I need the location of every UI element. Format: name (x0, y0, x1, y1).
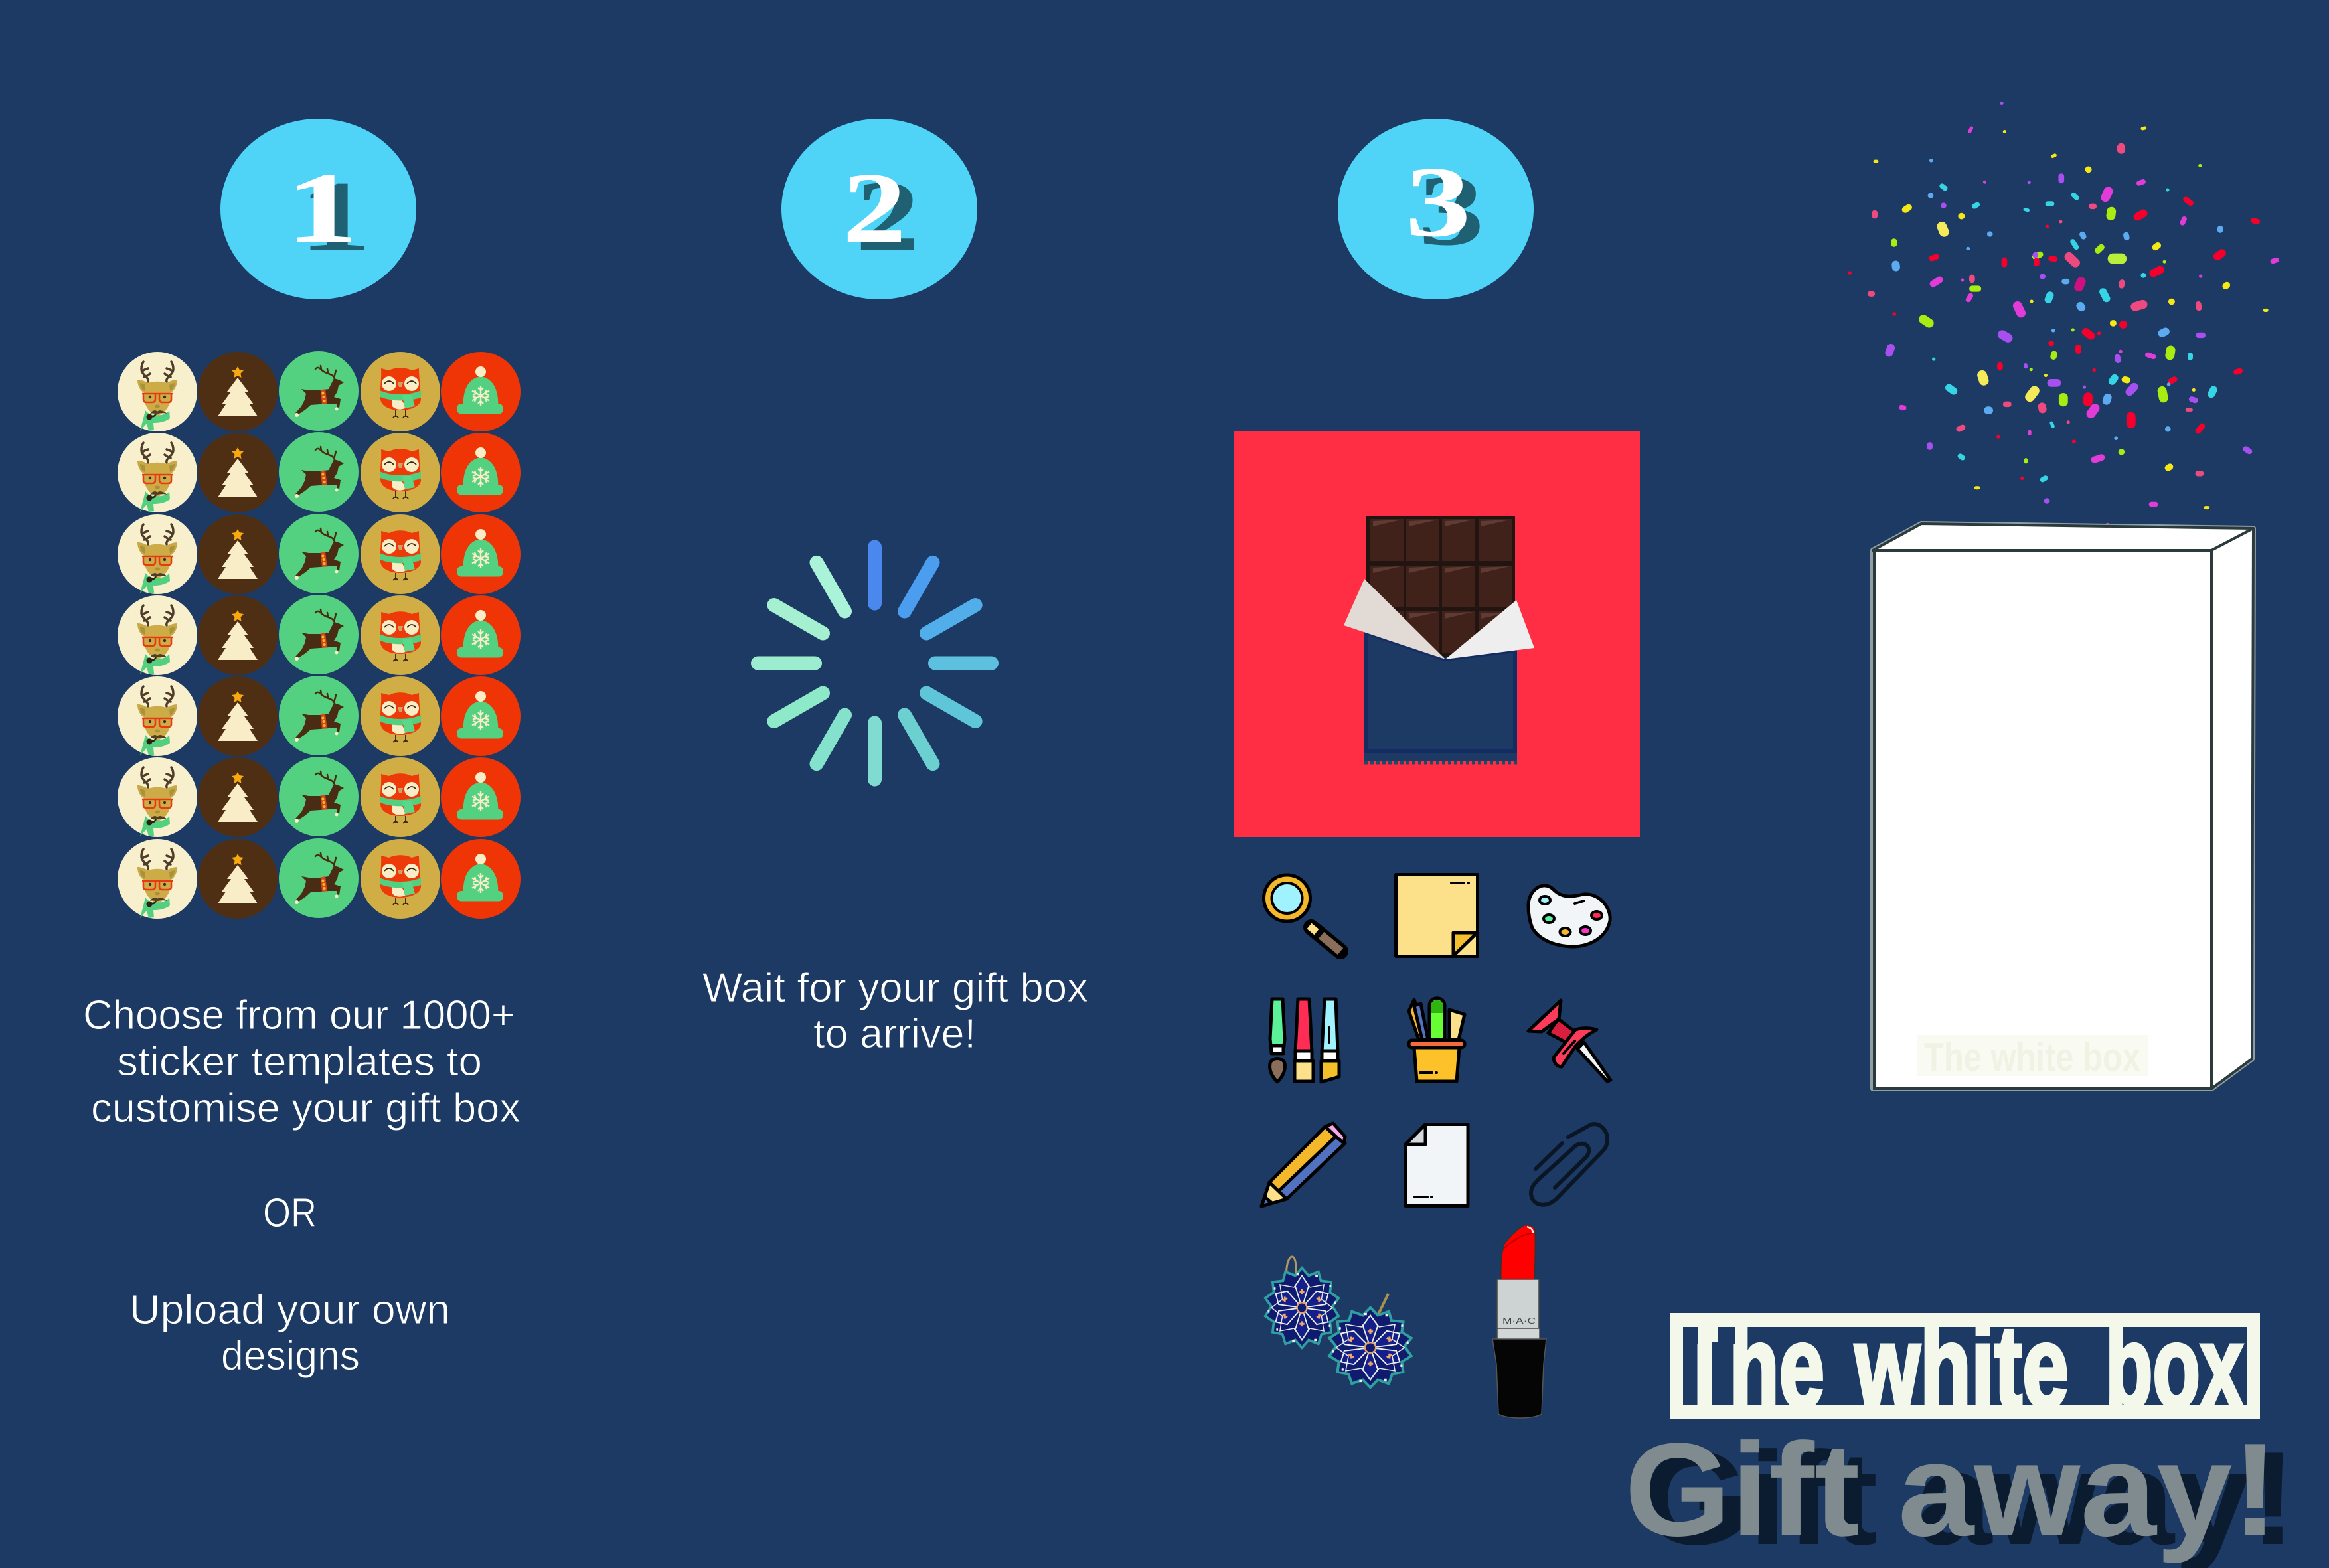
step 3 badge: 3 (1419, 155, 1484, 267)
faint logo on box: The white box (1924, 1035, 2140, 1079)
step 1 text: Choose from our 1000+ (83, 992, 515, 1038)
icon: paint palette (1528, 886, 1610, 947)
confetti: pink (1870, 147, 2201, 524)
step 1 badge: 1 (299, 160, 372, 272)
confetti: red (1850, 200, 2257, 478)
confetti burst (1850, 104, 2277, 524)
confetti: purple (1889, 104, 2249, 501)
lipstick: M·A·C (1502, 1316, 1536, 1326)
step 2 text (702, 965, 1088, 1057)
icon: pencil (1261, 1123, 1345, 1206)
icon: magnifying glass (1264, 875, 1340, 951)
confetti: lime (1894, 165, 2200, 462)
sticker sheet (118, 351, 521, 919)
slogan: Gift away!: Gift away! (1625, 1416, 2278, 1564)
step 1 badge: 1 (285, 151, 359, 264)
sticker row 2 (118, 432, 521, 512)
sticker row 4 (118, 595, 521, 675)
white gift box (1873, 524, 2253, 1089)
icon: brushes (1270, 999, 1339, 1082)
confetti: magenta (1901, 128, 2277, 505)
icon: sticky note (1396, 875, 1478, 956)
sticker row 3 (118, 514, 521, 594)
step 2 badge: 2 (843, 151, 906, 264)
icon: paper clip (1531, 1124, 1607, 1205)
step 3 badge: 3 (1405, 146, 1471, 258)
foil left (1344, 579, 1445, 659)
logo: The white box: white (1854, 1302, 2069, 1432)
step 1 text: sticker templates to (117, 1039, 482, 1085)
step 2 text: Wait for your gift box (702, 965, 1088, 1011)
confetti: blue (1895, 161, 2220, 438)
step 1 text: Upload your own (129, 1287, 450, 1333)
navy wrapper (1364, 633, 1517, 763)
icon: document (1405, 1125, 1468, 1206)
step 1 text: designs (221, 1333, 360, 1379)
earrings (1265, 1257, 1411, 1387)
step 1 text: customise your gift box (91, 1085, 521, 1131)
chocolate bar panel (1234, 431, 1640, 837)
step 3 badge (1338, 119, 1534, 299)
confetti: yellow (1875, 128, 2267, 508)
confetti: pale yellow (1942, 226, 2034, 397)
sticker row 1 (118, 351, 521, 431)
logo: The white box: The (1680, 1302, 1824, 1432)
step 1 text (83, 992, 521, 1379)
icon: push pin (1528, 1000, 1611, 1081)
sticker row 6 (118, 757, 521, 837)
confetti: cyan (1934, 186, 2213, 480)
logo: The white box (1670, 1302, 2260, 1432)
sticker row 5 (118, 676, 521, 756)
foil right (1445, 600, 1534, 659)
loading spinner (758, 547, 992, 779)
step 2 text: to arrive! (813, 1011, 976, 1057)
step 2 badge (781, 119, 977, 299)
step 1 text: OR (263, 1190, 317, 1236)
confetti: dark magenta (2079, 281, 2081, 287)
sticker row 7 (118, 838, 521, 919)
step 2 badge: 2 (856, 159, 920, 272)
icon: pencil cup (1409, 998, 1465, 1081)
chocolate bar (1366, 516, 1515, 662)
logo: The white box: box (2105, 1302, 2243, 1432)
lipstick (1492, 1225, 1546, 1418)
step 1 badge (220, 119, 416, 299)
